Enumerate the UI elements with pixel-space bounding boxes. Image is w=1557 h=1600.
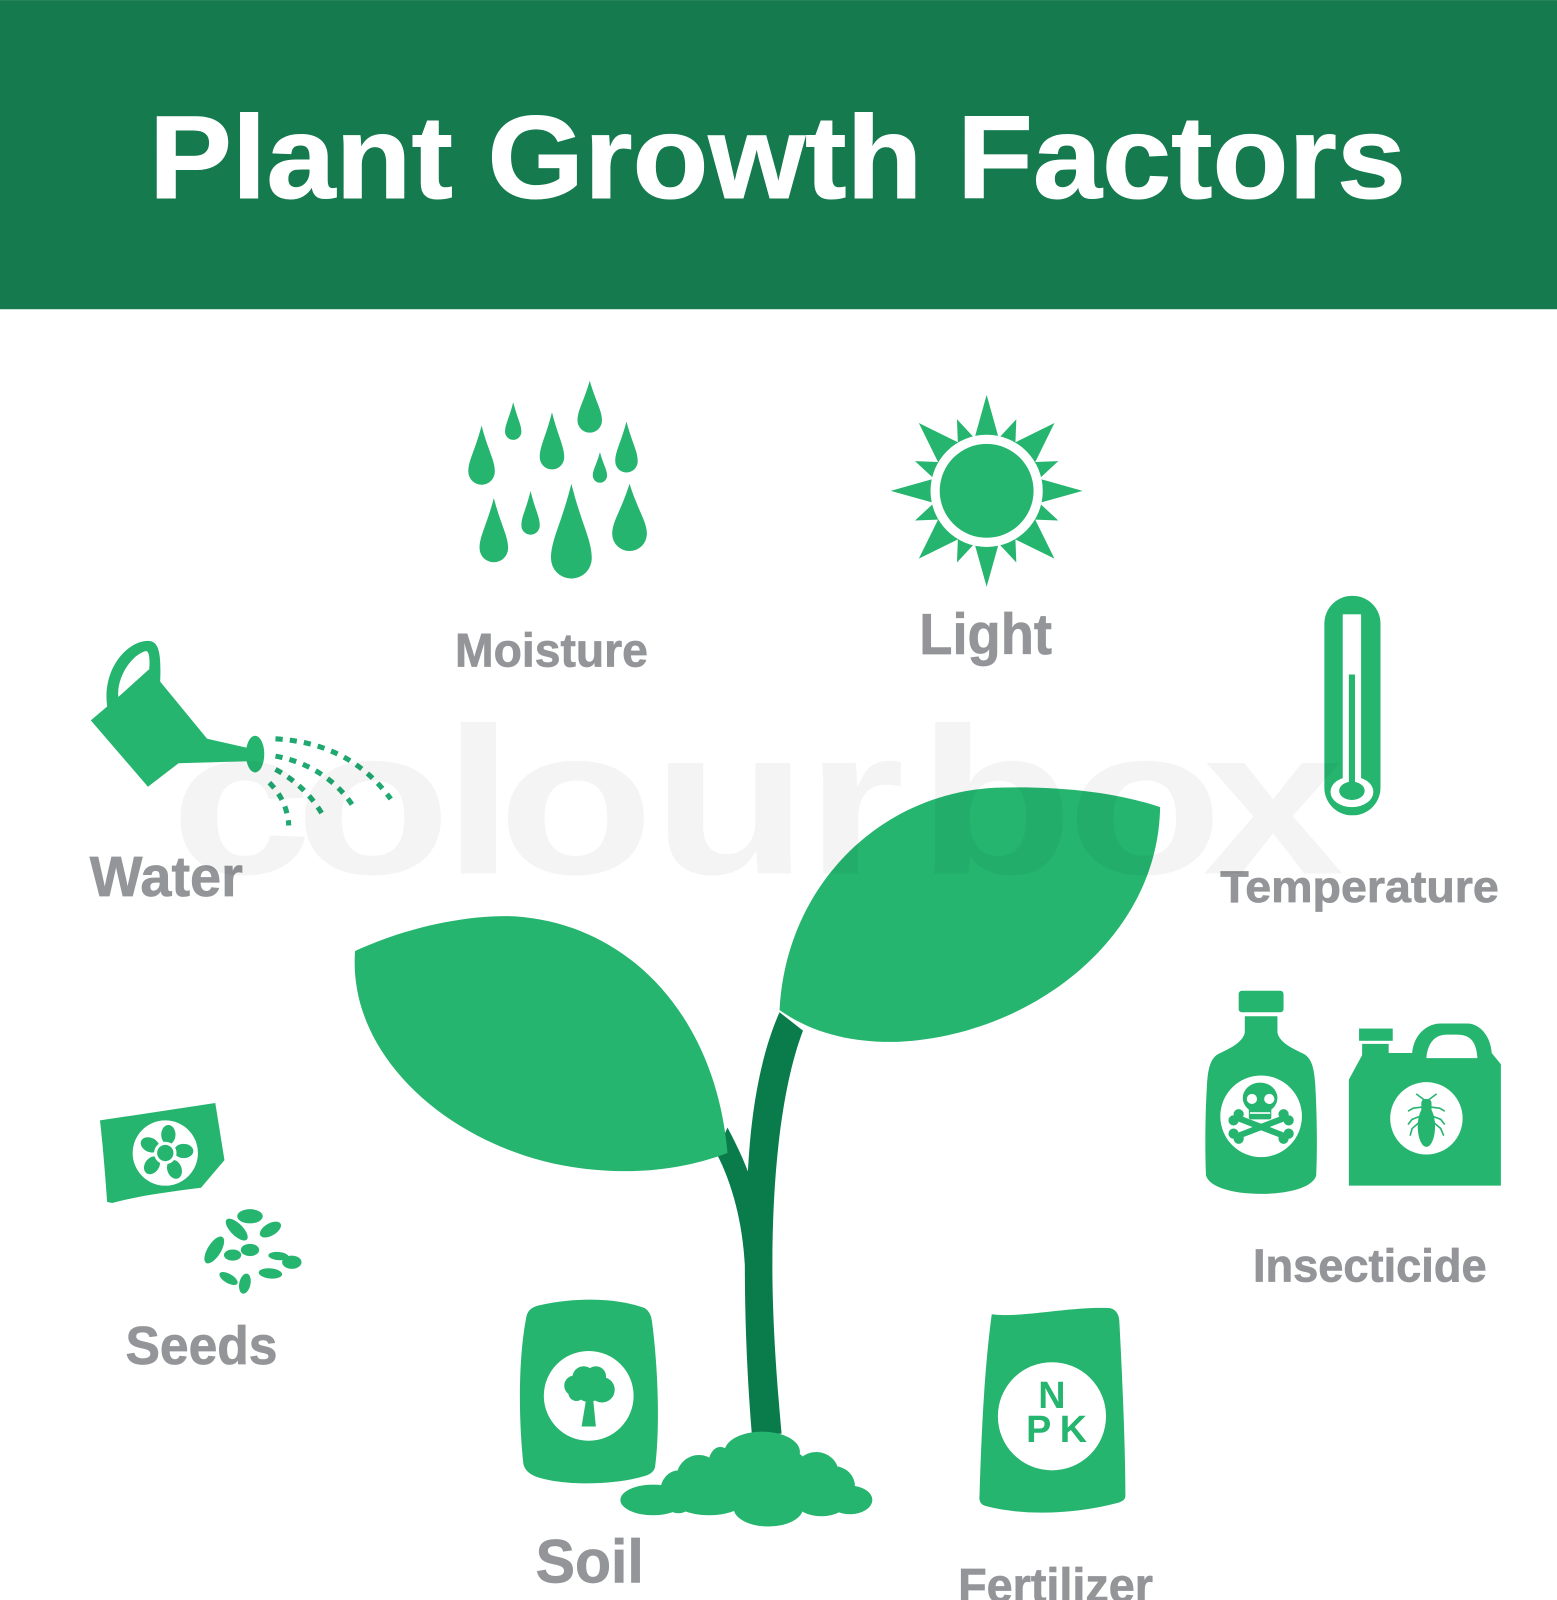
title: Plant Growth Factors: [149, 92, 1406, 224]
NPK letters: [1026, 1374, 1087, 1450]
flower emblem: [138, 1125, 193, 1181]
icon: fertilizer bag: [979, 1308, 1125, 1513]
NPK letters: N: [1038, 1374, 1066, 1416]
header banner: [0, 0, 1557, 309]
icon: seed packet: [100, 1103, 224, 1203]
right leaf: [780, 787, 1160, 1042]
soil mound: [620, 1432, 872, 1526]
label: Water: Water: [90, 845, 243, 908]
water spray: [269, 739, 391, 826]
NPK letters: K: [1060, 1408, 1087, 1450]
skull and crossbones: [1228, 1083, 1294, 1144]
icon: moisture drops: [468, 381, 647, 579]
plant stem: [716, 1012, 803, 1436]
icon: soil bag: [520, 1300, 658, 1483]
icon: scattered seeds: [201, 1209, 302, 1295]
watermark: colourbox: [171, 685, 1344, 918]
label: Insecticide: Insecticide: [1253, 1240, 1487, 1292]
insect emblem: [1408, 1094, 1445, 1147]
icon: watering can: [91, 641, 391, 826]
icon: poison bottle: [1205, 991, 1317, 1194]
icon: insecticide jug: [1349, 1023, 1501, 1186]
NPK letters: P: [1026, 1408, 1051, 1450]
label: Light: Light: [919, 603, 1052, 667]
icon: sun: [891, 395, 1083, 587]
label: Moisture: Moisture: [455, 624, 648, 676]
label: Soil: Soil: [536, 1528, 644, 1596]
tree emblem: [564, 1366, 615, 1426]
label: Seeds: Seeds: [125, 1316, 278, 1376]
left leaf: [355, 916, 727, 1171]
label: Temperature: Temperature: [1220, 861, 1499, 912]
icon: thermometer: [1324, 596, 1380, 815]
